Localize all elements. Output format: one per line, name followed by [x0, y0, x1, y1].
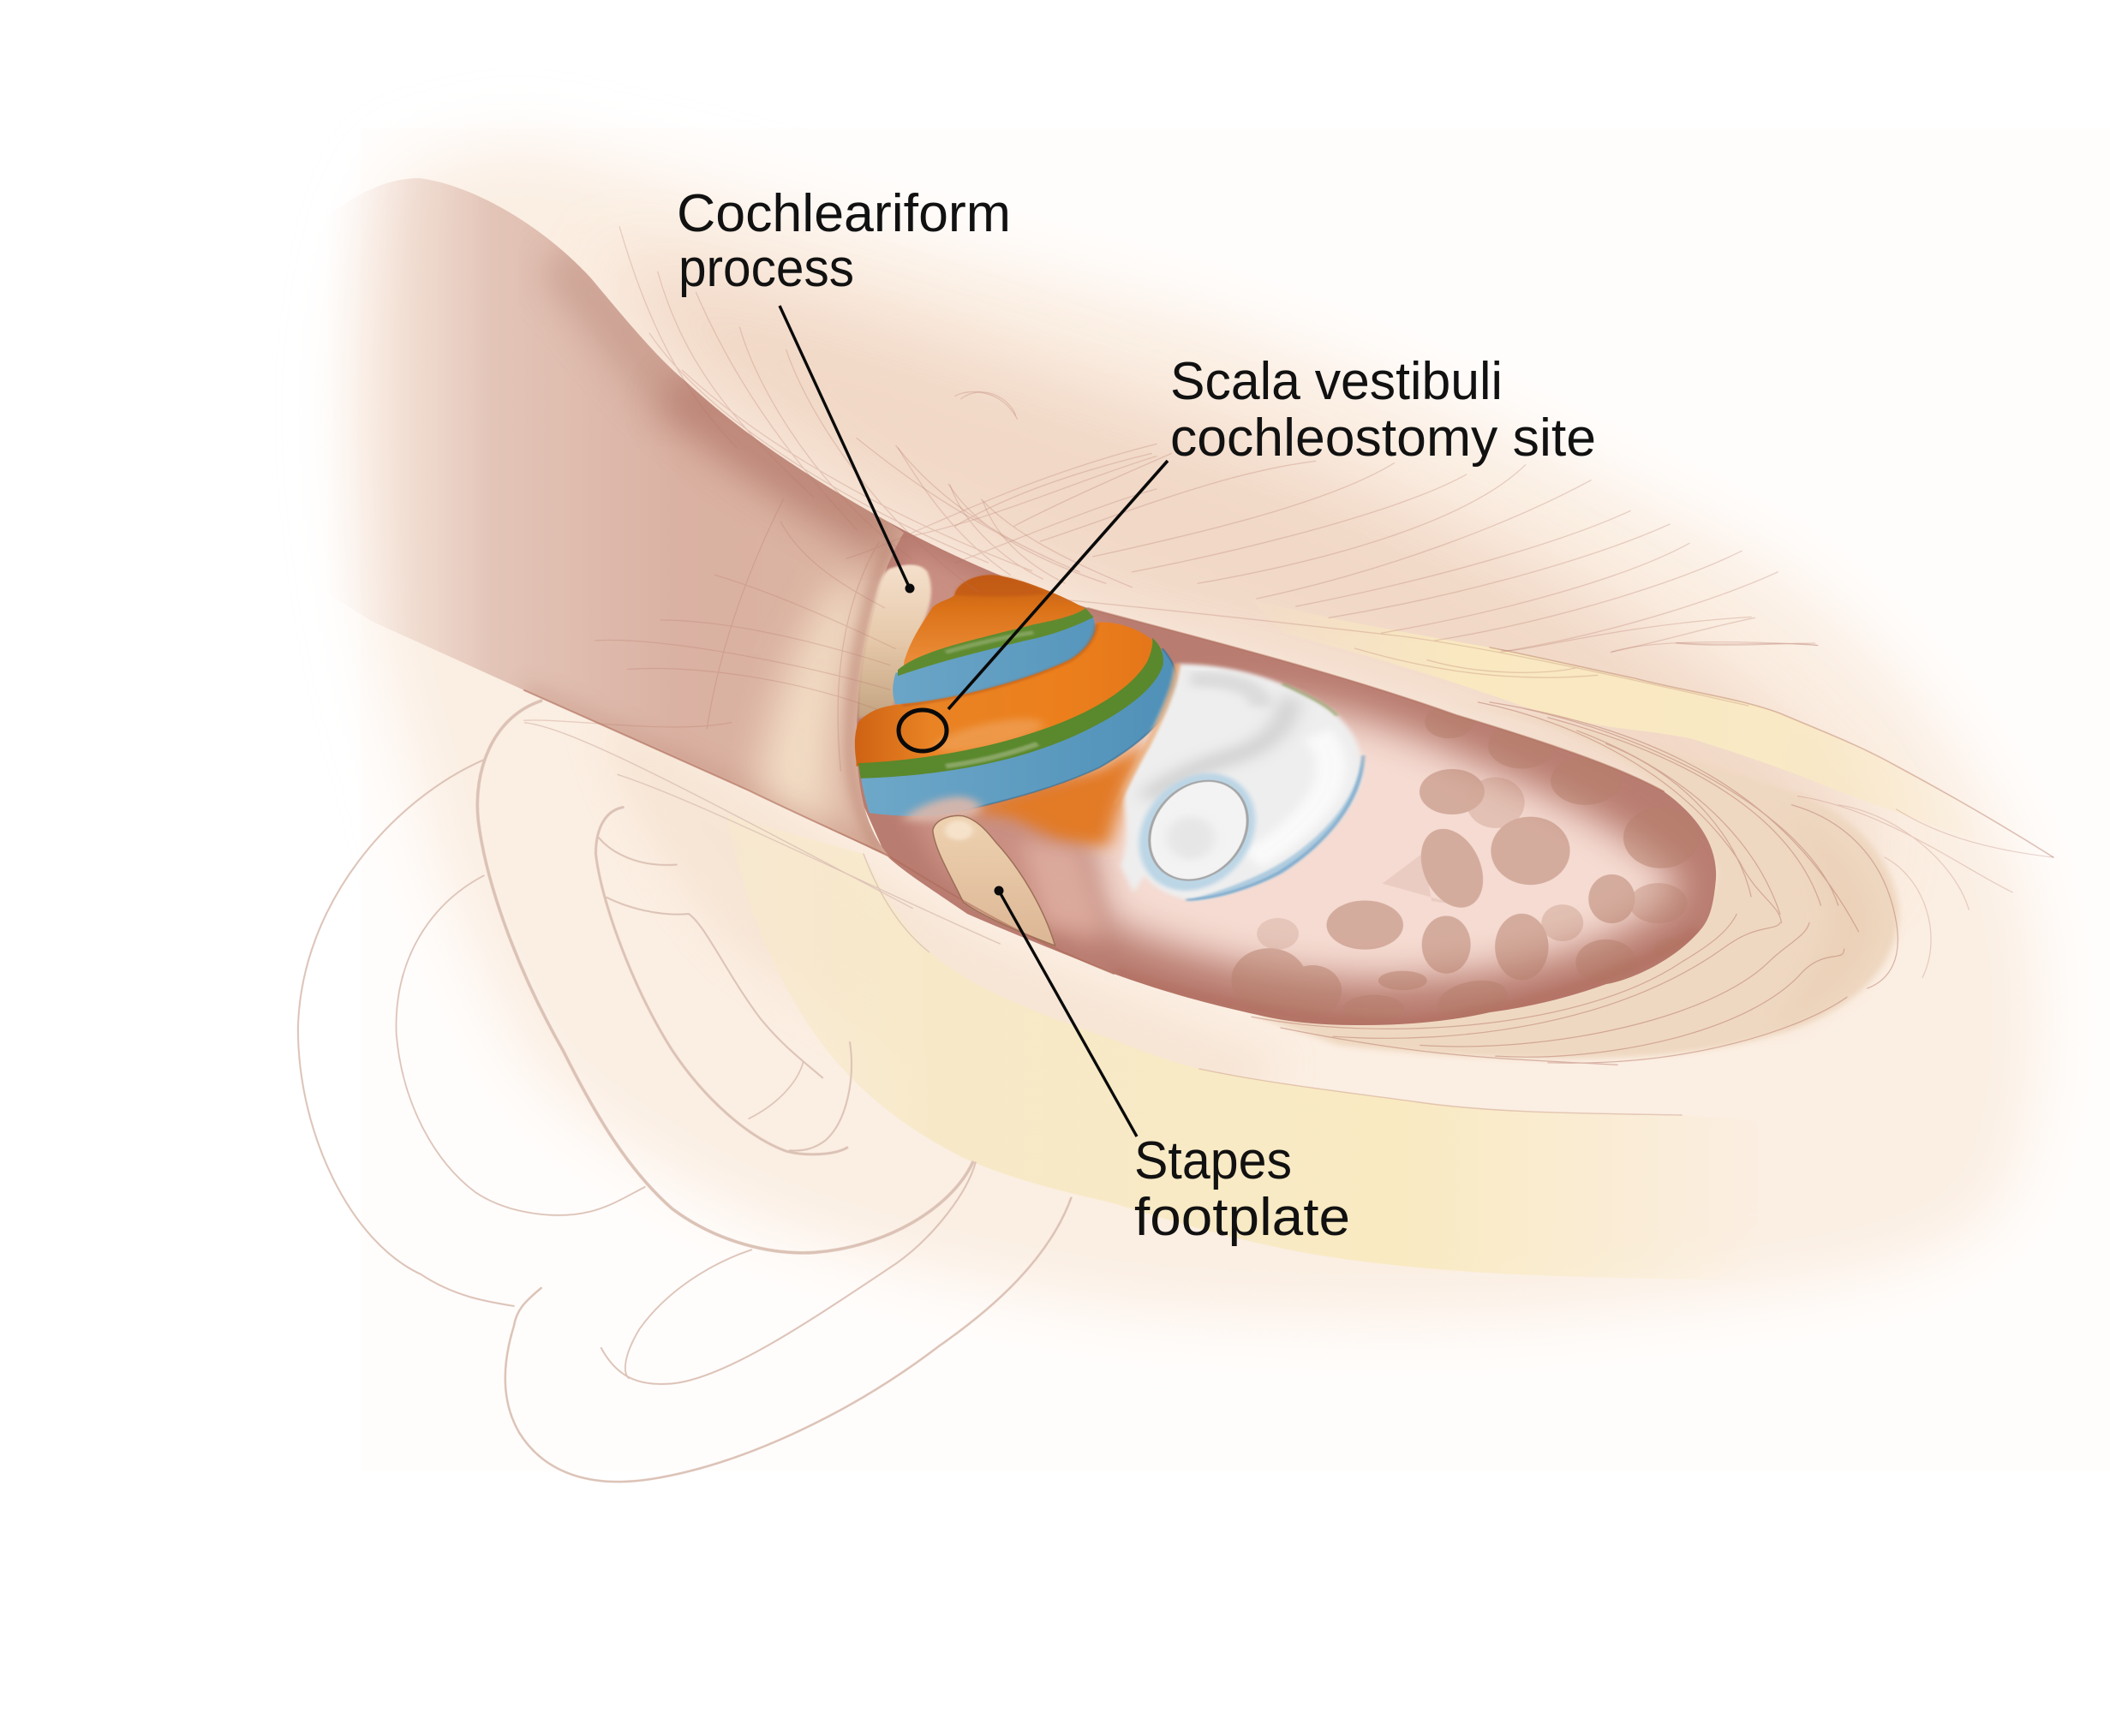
label: Cochleariform process	[677, 184, 1011, 298]
label: Stapes footplate: Stapes	[1134, 1131, 1292, 1190]
pencil edges of canal and cavity	[524, 608, 2053, 1115]
label: Stapes footplate: footplate	[1134, 1188, 1350, 1247]
fibre hatching: canal and upper wall left	[523, 227, 1157, 771]
leader line: stapes footplate	[994, 886, 1137, 1136]
label: Scala vestibuli cochleostomy site: cochleostomy site	[1170, 409, 1596, 468]
upper cochlear turn orange	[902, 575, 1092, 676]
cochleostomy site marker circle	[899, 710, 947, 751]
leader line: scala vestibuli cochleostomy site	[948, 461, 1168, 709]
upper yellow bone band	[1250, 600, 2053, 857]
upper cochlear turn green	[898, 608, 1094, 676]
basal cochlear turn green	[858, 638, 1163, 779]
semicircular canal outlines	[298, 701, 1071, 1482]
basal cochlear turn orange	[855, 623, 1155, 767]
ear canal wall	[356, 178, 904, 858]
label: Cochleariform process: process	[678, 239, 854, 298]
faint outer fibres at the right	[1502, 617, 2053, 977]
label: Cochleariform process: Cochleariform	[677, 184, 1011, 243]
basal cochlear turn blue	[861, 648, 1177, 816]
trabecular air cells	[1232, 717, 1686, 1000]
fibre hatching: fan around cavity tip	[1252, 702, 1898, 1065]
anatomical illustration	[296, 128, 2065, 1483]
middle ear cavity	[840, 471, 1730, 1036]
label: Stapes footplate	[1134, 1131, 1350, 1247]
leader line: cochleariform process	[780, 306, 915, 593]
lower yellow bone band	[726, 815, 1765, 1280]
oval window	[1122, 765, 1272, 899]
tan fibrous crescent around the cavity tip	[1252, 702, 1899, 1059]
vestibule white bone	[1121, 664, 1362, 901]
label: Scala vestibuli cochleostomy site	[1170, 352, 1596, 468]
stapes footplate	[933, 815, 1055, 946]
label: Scala vestibuli cochleostomy site: Scala vestibuli	[1170, 352, 1503, 411]
peach background tissue	[356, 146, 2038, 1318]
cochleariform process	[858, 564, 931, 719]
fibre hatching: upper wall right	[857, 392, 1817, 706]
stapes footplate bone and cochlear structures	[855, 564, 1363, 946]
lower orange promontory	[963, 740, 1151, 847]
upper cochlear turn blue	[893, 615, 1095, 704]
